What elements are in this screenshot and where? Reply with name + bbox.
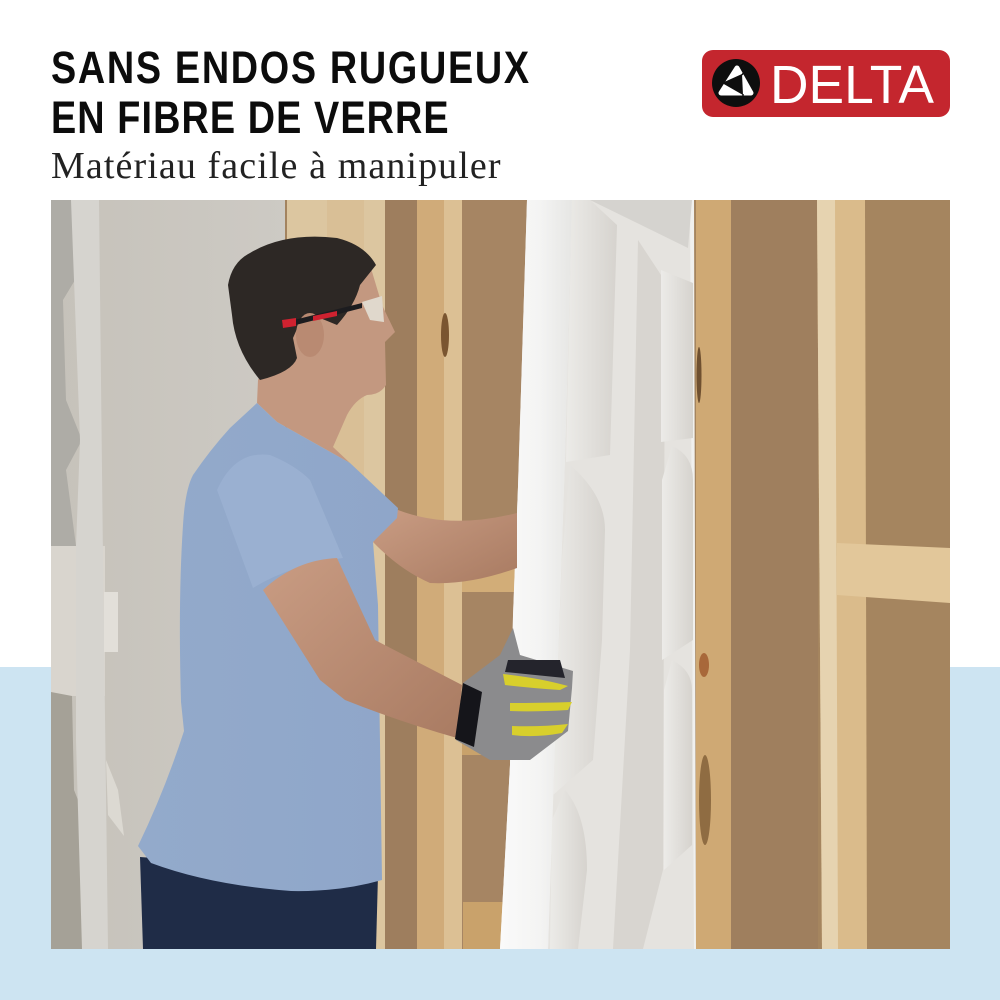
near arm — [263, 558, 462, 738]
logo: Delta: DELTA — [770, 55, 934, 115]
raised block 2 — [553, 465, 605, 795]
centre column — [613, 240, 665, 949]
title line 2: EN FIBRE DE VERRE — [51, 92, 450, 143]
right wall and studs — [690, 200, 950, 949]
shirt — [138, 403, 398, 891]
drywall — [51, 200, 291, 949]
subtitle: Matériau facile à manipuler — [51, 145, 502, 187]
hair — [228, 237, 376, 380]
raised block 3 — [550, 790, 587, 949]
background band — [0, 667, 1000, 1000]
neck and face — [257, 265, 395, 463]
sleeve — [217, 454, 343, 588]
glasses — [282, 296, 384, 328]
shower wall panel — [500, 200, 696, 949]
heading block — [51, 42, 531, 187]
back wall and studs — [285, 200, 530, 949]
man — [138, 237, 517, 949]
photo: man carrying white shower wall panel — [51, 200, 950, 949]
raised block 1 — [566, 200, 617, 462]
top ribbed piece — [590, 200, 692, 248]
logo: Delta — [702, 50, 950, 117]
channel — [548, 200, 694, 949]
title line 1: SANS ENDOS RUGUEUX — [51, 42, 531, 93]
ear — [296, 313, 324, 357]
far arm — [373, 510, 517, 583]
glove — [455, 628, 573, 760]
outer rail — [500, 200, 572, 949]
right blocks — [661, 270, 693, 442]
jeans — [140, 857, 378, 949]
